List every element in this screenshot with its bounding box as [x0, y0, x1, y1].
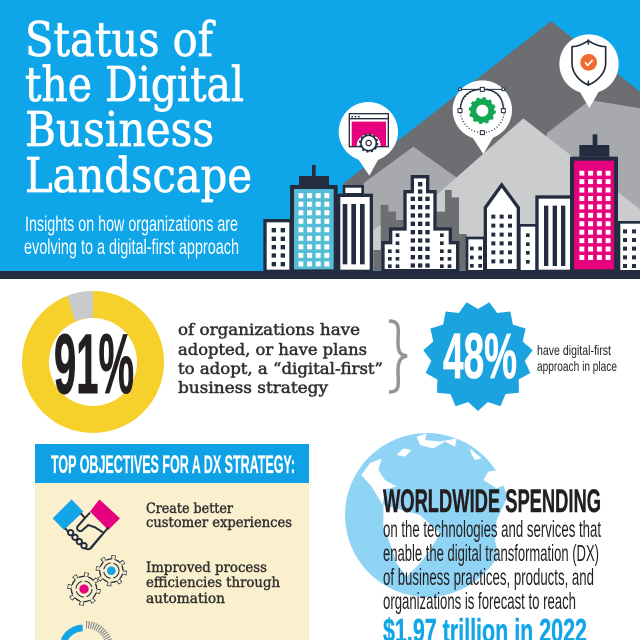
pin: security shield	[559, 34, 619, 108]
text: 48% description: have digital-first	[537, 342, 611, 358]
illustration: city skyline and mountains	[265, 21, 640, 271]
text: objective 2: Improved process	[146, 560, 267, 576]
globe	[345, 433, 527, 597]
mountain: dark	[343, 21, 640, 271]
building: small white	[467, 238, 484, 271]
building: teal tower	[292, 165, 336, 271]
building: magenta tower	[572, 134, 616, 271]
subtitle: evolving to a digital-first approach	[24, 236, 239, 259]
text: 91% description: to adopt, a “digital-first”	[178, 360, 383, 378]
title	[25, 12, 252, 204]
panel heading	[35, 444, 309, 483]
background skyline silhouette	[373, 190, 467, 271]
building: far left white	[265, 221, 291, 271]
building: narrow white	[519, 225, 537, 271]
donut chart: 91%	[36, 291, 150, 420]
globe: land masses	[361, 433, 527, 577]
donut chart: 91%: 91%	[54, 317, 134, 411]
badge: 48%: 48%	[443, 320, 517, 392]
pin: web settings	[339, 102, 398, 176]
building: peaked roof white	[485, 185, 518, 271]
building: stepped centre tower	[383, 177, 458, 271]
text: objective 1: Create better	[146, 501, 234, 517]
mountain: medium right	[547, 100, 640, 271]
text: 91% description: of organizations have	[178, 321, 360, 339]
panel heading: TOP OBJECTIVES FOR A DX STRATEGY:	[51, 451, 295, 479]
title: the Digital	[25, 57, 244, 113]
subtitle	[24, 213, 239, 259]
panel: top objectives	[35, 444, 309, 640]
text: objective 2: efficiencies through	[146, 575, 280, 591]
title: Business	[25, 102, 214, 158]
text: 91% description	[178, 321, 383, 397]
building: striped white right	[537, 197, 572, 271]
title: Landscape	[25, 148, 252, 204]
pin: green gear	[453, 80, 512, 154]
text: 48% description	[537, 342, 617, 374]
ground bar	[0, 271, 640, 279]
mountain: medium left	[363, 147, 460, 271]
text: objective 1: customer experiences	[146, 515, 292, 531]
header background	[0, 0, 640, 271]
brace	[389, 321, 407, 392]
text: objective 1	[146, 501, 292, 531]
text: objective 2: automation	[146, 591, 225, 607]
text: 91% description: business strategy	[178, 379, 328, 397]
text: 91% description: adopted, or have plans	[178, 341, 367, 359]
building: striped white	[339, 186, 371, 271]
mountain: light	[437, 118, 640, 271]
icon: partial chart	[64, 625, 108, 640]
icon: handshake	[53, 499, 120, 549]
title: Status of	[25, 12, 216, 68]
badge: 48%	[423, 302, 533, 411]
subtitle: Insights on how organizations are	[25, 213, 238, 236]
icon: gears	[69, 557, 125, 604]
text: worldwide spending	[383, 483, 601, 614]
building: far right white	[619, 222, 640, 271]
text: objective 2	[146, 560, 280, 607]
